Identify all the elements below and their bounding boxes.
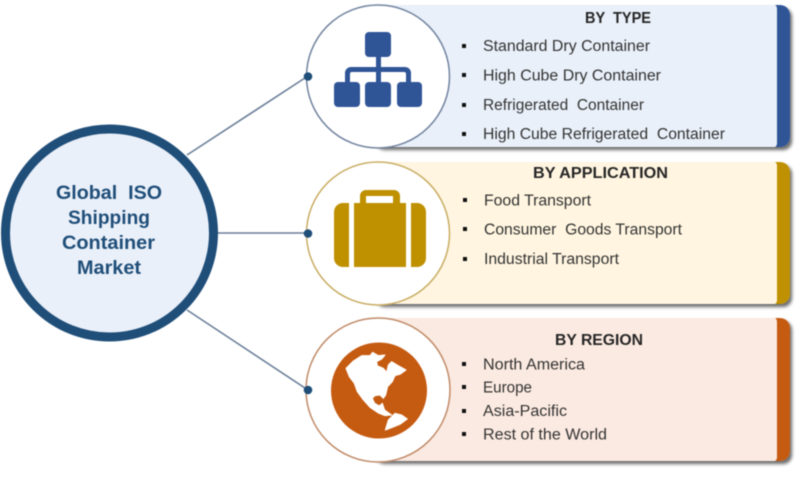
list: region items: Asia-Pacific bbox=[483, 403, 567, 420]
connector dot: region bbox=[304, 386, 312, 394]
circle: application icon badge bbox=[306, 162, 450, 305]
list: application items: Consumer Goods Transport bbox=[484, 222, 683, 238]
list: region items: North America bbox=[483, 356, 585, 374]
list: application items: Industrial Transport bbox=[484, 251, 620, 268]
circle: type icon badge bbox=[306, 5, 450, 148]
central circle: market title: Market bbox=[77, 257, 142, 279]
central circle: market title: Container bbox=[62, 232, 155, 254]
list: application items bbox=[463, 192, 683, 268]
panel: by region bbox=[370, 318, 792, 464]
heading: by region: BY REGION bbox=[555, 332, 643, 349]
circle: region icon badge bbox=[306, 318, 450, 462]
list: region items: Europe bbox=[483, 380, 532, 396]
icon: globe bbox=[331, 342, 427, 438]
central circle: market title: Shipping bbox=[68, 207, 150, 229]
list: type items: High Cube Dry Container bbox=[483, 68, 661, 84]
panel: by type bbox=[370, 5, 792, 150]
connector dot: application bbox=[304, 229, 312, 238]
list: type items: High Cube Refrigerated Container bbox=[483, 126, 725, 143]
list: type items: Standard Dry Container bbox=[483, 38, 650, 55]
panel: by application bbox=[370, 162, 792, 307]
list: region items: Rest of the World bbox=[483, 426, 607, 444]
list: application items: Food Transport bbox=[484, 192, 592, 210]
central circle: market title: Global ISO bbox=[56, 182, 162, 204]
connector dot: type bbox=[304, 72, 312, 81]
heading: by application: BY APPLICATION bbox=[533, 165, 668, 182]
icon: briefcase bbox=[334, 190, 426, 267]
list: type items bbox=[462, 38, 725, 143]
list: type items: Refrigerated Container bbox=[483, 97, 644, 114]
list: region items bbox=[462, 356, 607, 444]
central circle: market title bbox=[6, 129, 214, 337]
icon: hierarchy bbox=[334, 32, 422, 107]
heading: by type: BY TYPE bbox=[585, 10, 651, 27]
connector lines bbox=[187, 76, 308, 390]
